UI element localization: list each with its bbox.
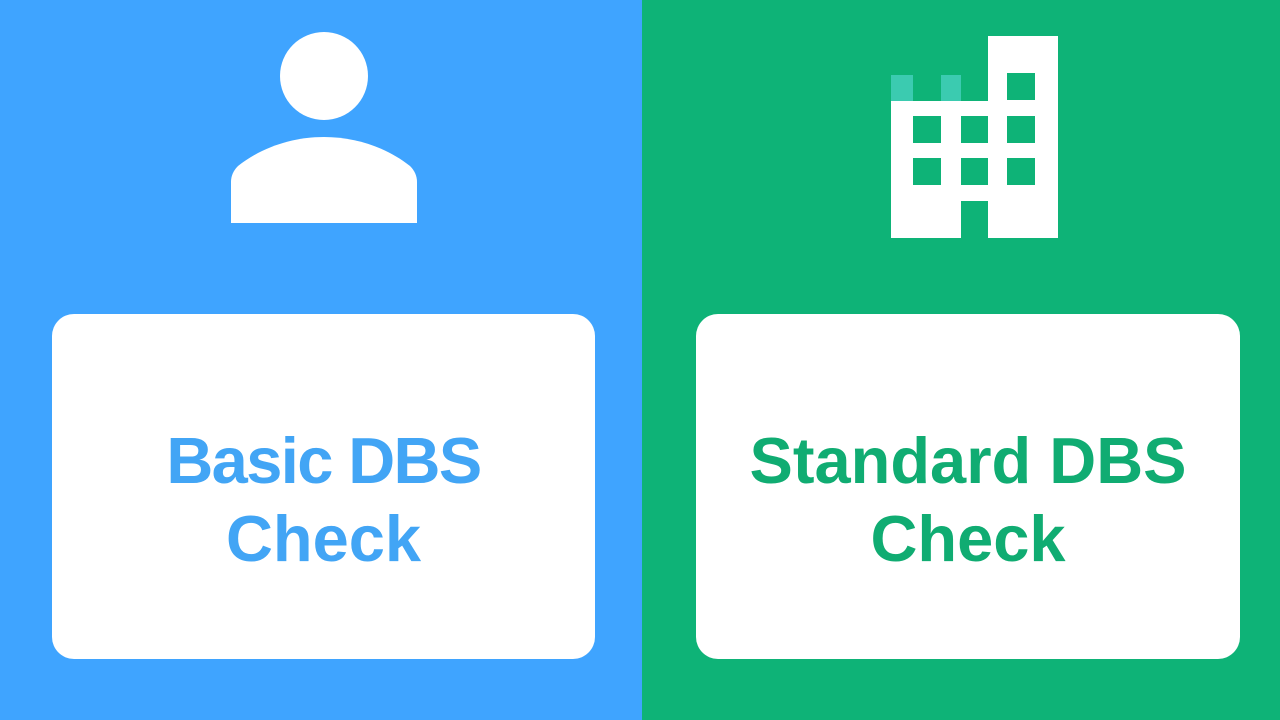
card: basic DBS check [52,314,595,659]
card heading: basic DBS check [166,424,481,575]
icon: office building [891,36,1058,238]
panel: basic DBS check [0,0,642,720]
icon: person [231,32,417,223]
panel: standard DBS check [642,0,1280,720]
card heading: standard DBS check: Check [870,502,1066,575]
card heading: standard DBS check [749,424,1186,575]
card: standard DBS check [696,314,1240,659]
card heading: standard DBS check: Standard DBS [749,424,1186,497]
card heading: basic DBS check: Basic DBS [166,424,481,497]
card heading: basic DBS check: Check [226,502,421,575]
